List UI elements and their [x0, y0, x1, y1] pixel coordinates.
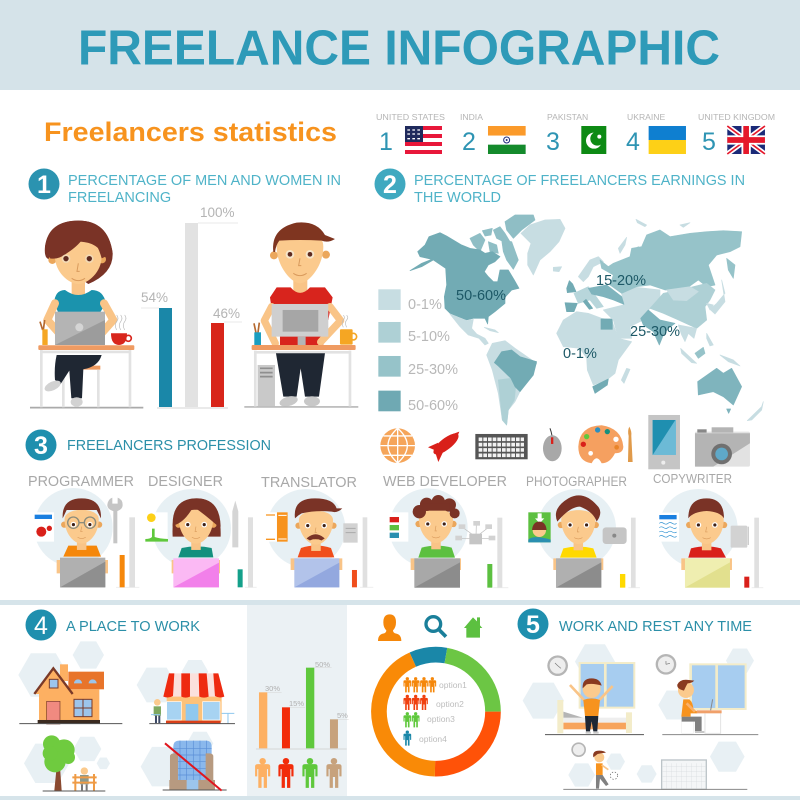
- section 1 heading: [28, 168, 341, 206]
- map legend: [378, 289, 401, 411]
- gender bar chart: 46%: [213, 306, 240, 321]
- photographer: [528, 489, 640, 588]
- profession labels: WEB DEVELOPER: [383, 474, 507, 490]
- profession labels: [28, 471, 732, 491]
- map legend labels: 50-60%: [408, 398, 458, 414]
- top countries ranking: UKRAINE: [627, 112, 665, 122]
- section 4 scenes: [18, 641, 235, 791]
- section 4 heading: [26, 610, 200, 640]
- man at desk: [244, 222, 358, 408]
- section 1 heading: PERCENTAGE OF MEN AND WOMEN IN: [68, 173, 341, 189]
- gender bar chart: 54%: [141, 290, 168, 305]
- scene: waking up: [523, 644, 644, 735]
- icon: person: [378, 614, 401, 641]
- icon: computer mouse: [543, 428, 562, 461]
- option labels: option1: [439, 680, 467, 690]
- top countries ranking: 1: [379, 128, 393, 156]
- copywriter: [657, 489, 763, 588]
- option labels: [419, 680, 467, 744]
- top countries ranking: PAKISTAN: [547, 112, 588, 122]
- icon: globe: [380, 428, 415, 463]
- scene: working: [656, 648, 758, 735]
- option labels: option2: [436, 699, 464, 709]
- scene: playing football: [563, 742, 747, 789]
- flag: United States: [405, 126, 442, 154]
- top countries ranking: UNITED STATES: [376, 112, 445, 122]
- option labels: option3: [427, 714, 455, 724]
- bar chart: places: 5%: [337, 711, 348, 720]
- top countries ranking: 4: [626, 128, 640, 156]
- profession labels: TRANSLATOR: [261, 475, 357, 491]
- top countries ranking: INDIA: [460, 112, 483, 122]
- icon: home: [464, 617, 482, 638]
- donut chart: [379, 655, 493, 769]
- icon: magnifier: [426, 617, 446, 637]
- professions row A: [32, 488, 373, 587]
- top small icons: [378, 614, 493, 769]
- bar chart: places: 15%: [289, 699, 304, 708]
- section 5 heading: WORK AND REST ANY TIME: [559, 619, 752, 635]
- section 2 heading: 2: [383, 171, 397, 199]
- section 5 scenes: [523, 644, 758, 789]
- option pictograms: [403, 677, 436, 746]
- world map: [410, 215, 763, 425]
- bar chart: places: 30%: [265, 684, 280, 693]
- icon: tablet: [648, 415, 680, 469]
- option labels: option4: [419, 734, 447, 744]
- place: office crossed out: [141, 732, 227, 791]
- place: home: [18, 641, 122, 724]
- map value labels: 0-1%: [563, 346, 597, 362]
- place: cafe: [137, 660, 235, 724]
- icon: paint palette: [578, 425, 633, 463]
- place: park: [24, 735, 110, 791]
- top countries ranking: 2: [462, 128, 476, 156]
- section 5 heading: 5: [526, 611, 540, 639]
- flag: India: [488, 126, 526, 154]
- designer: [145, 489, 257, 587]
- map value labels: [456, 273, 680, 362]
- map: Americas: [410, 215, 565, 425]
- map value labels: 15-20%: [596, 273, 646, 289]
- map: Eurasia, Africa and Oceania: [557, 219, 763, 421]
- heading: freelancers statistics: Freelancers statistics: [44, 117, 337, 147]
- section 2 heading: PERCENTAGE OF FREELANCERS EARNINGS IN: [414, 173, 745, 189]
- profession labels: COPYWRITER: [653, 471, 732, 486]
- section 3 heading: FREELANCERS PROFESSION: [67, 438, 271, 454]
- woman at desk: [30, 221, 143, 408]
- gender bar chart: [141, 205, 242, 408]
- top countries ranking: 3: [546, 128, 560, 156]
- web developer: [387, 488, 508, 588]
- icon: rocket: [428, 430, 462, 462]
- section 1 heading: FREELANCING: [68, 190, 171, 206]
- map value labels: 50-60%: [456, 288, 506, 304]
- bar chart: places: [255, 660, 349, 788]
- flag: Pakistan: [581, 126, 606, 154]
- profession labels: PROGRAMMER: [28, 474, 134, 490]
- section 2 heading: THE WORLD: [414, 190, 501, 206]
- translator: [265, 489, 373, 587]
- section 4 heading: 4: [34, 612, 48, 640]
- section 3 heading: [26, 430, 271, 460]
- map value labels: 25-30%: [630, 324, 680, 340]
- flag: United Kingdom: [727, 126, 765, 154]
- map legend labels: [408, 297, 458, 414]
- top countries ranking: [376, 112, 775, 156]
- icon: keyboard: [475, 434, 528, 459]
- gender bar chart: 100%: [200, 205, 235, 220]
- profession labels: DESIGNER: [148, 474, 223, 490]
- title banner: [0, 0, 800, 90]
- top countries ranking: 5: [702, 128, 716, 156]
- section 5 heading: [518, 608, 752, 640]
- professions row B: [387, 488, 763, 588]
- top countries ranking: UNITED KINGDOM: [698, 112, 775, 122]
- map legend labels: 5-10%: [408, 329, 450, 345]
- section 2 heading: [374, 168, 745, 206]
- map legend labels: 0-1%: [408, 297, 442, 313]
- section 4 heading: A PLACE TO WORK: [66, 619, 200, 635]
- profession labels: PHOTOGRAPHER: [526, 474, 627, 489]
- divider bands and chart panel: [0, 600, 800, 800]
- icon: camera: [695, 427, 750, 467]
- section 1 heading: 1: [37, 171, 51, 199]
- title banner: FREELANCE INFOGRAPHIC: [78, 22, 720, 76]
- tools icon row: [380, 415, 750, 469]
- section 3 heading: 3: [34, 432, 48, 460]
- map legend labels: 25-30%: [408, 362, 458, 378]
- flag: Ukraine: [649, 126, 686, 154]
- bar chart: places: 50%: [315, 660, 330, 669]
- programmer: [32, 488, 139, 587]
